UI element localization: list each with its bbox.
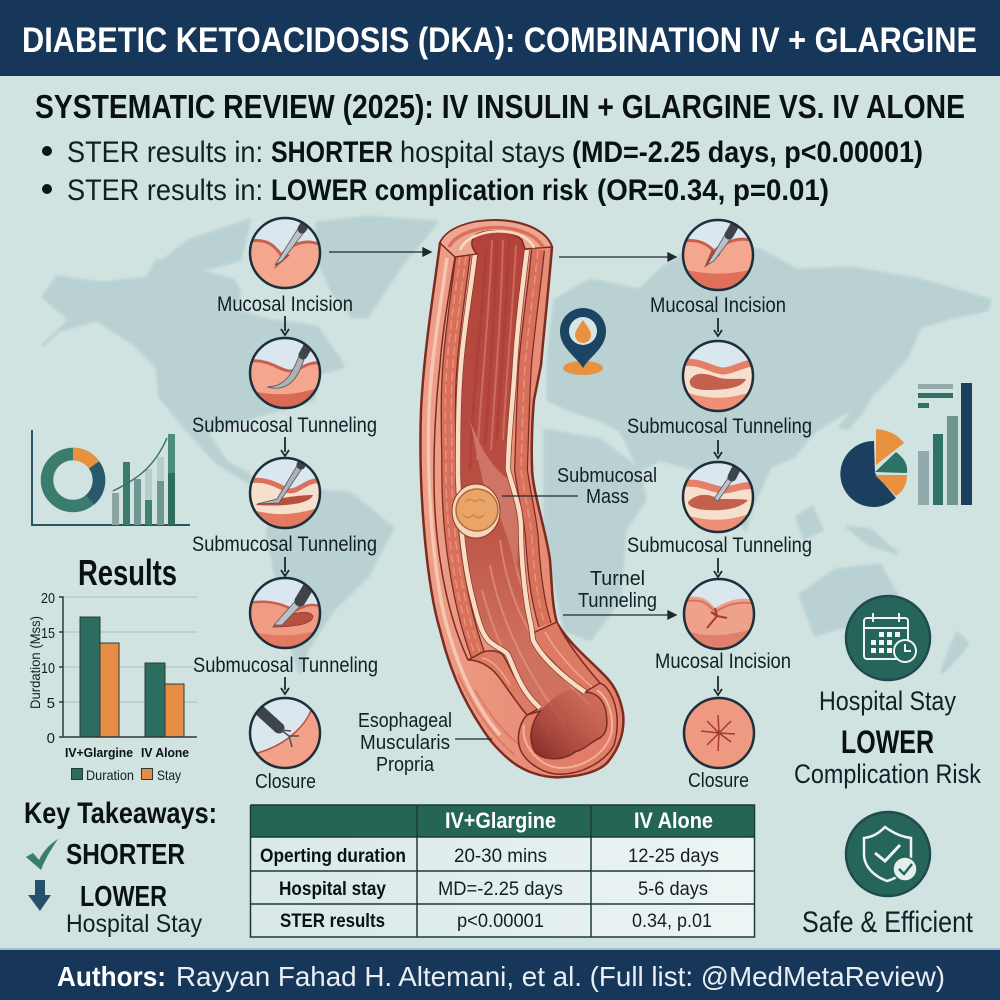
legend: Stay <box>157 767 181 783</box>
right muscle layer <box>521 250 545 625</box>
icon: step 4 tunneling <box>249 577 321 649</box>
arrow <box>281 677 289 694</box>
bullet: shorter hospital stays: STER results in: <box>67 136 263 169</box>
top cross-section ring <box>440 220 552 257</box>
y axis numbers: 0 <box>47 730 55 747</box>
hospital stay: Hospital Stay <box>66 910 202 938</box>
lumen streaks <box>470 240 509 470</box>
esophagus illustration <box>420 220 623 777</box>
arrow <box>281 316 289 335</box>
icon: step 4 incision crack <box>683 578 755 650</box>
y axis numbers: 5 <box>47 695 55 712</box>
bullet: lower complication risk: STER results in: <box>67 174 263 207</box>
icon: step 5 closure <box>249 697 321 769</box>
table header row: IV Alone <box>634 808 713 833</box>
arrow <box>714 318 722 336</box>
y axis numbers: 20 <box>41 590 55 607</box>
wall highlights <box>428 258 500 735</box>
key takeaways <box>24 797 217 938</box>
arrow <box>714 676 722 695</box>
fold beside mass <box>470 420 520 570</box>
label: submucosal mass: Mass <box>586 486 629 508</box>
label: hospital stay lower complication risk: Hospital Stay <box>819 686 956 716</box>
row: operating duration <box>260 846 719 867</box>
label: submucosal tunneling: Submucosal Tunneling <box>627 415 812 438</box>
y axis numbers: 15 <box>41 625 55 642</box>
label: closure: Closure <box>688 770 749 792</box>
row: operating duration: 20-30 mins <box>454 846 547 867</box>
footer bar with authors: Authors: <box>57 961 166 992</box>
icon: step 1 incision <box>249 213 321 289</box>
arrow <box>281 437 289 456</box>
bullet: shorter hospital stays: (MD=-2.25 days, p<0.00001) <box>572 136 923 169</box>
left lower strip <box>468 651 540 715</box>
label: esophageal muscularis propria: Muscularis <box>360 732 450 754</box>
y axis numbers <box>41 590 55 747</box>
row: ster results: STER results <box>280 911 385 932</box>
table cells <box>250 837 755 937</box>
label: submucosal mass: Submucosal <box>557 465 657 487</box>
bullet: shorter hospital stays: hospital stays <box>400 136 565 169</box>
lower: LOWER <box>80 881 167 913</box>
heading: results: Results <box>78 552 177 593</box>
legend: Duration <box>86 767 134 783</box>
table header row <box>250 805 755 837</box>
icon: step 1 incision <box>682 219 754 291</box>
bullet: lower complication risk <box>42 174 829 207</box>
icon: check <box>26 839 58 870</box>
outer wall <box>420 220 623 777</box>
icon: step 5 closure scar <box>684 698 754 768</box>
label: submucosal tunneling: Submucosal Tunneling <box>193 654 378 677</box>
bottom opening rim <box>518 682 617 774</box>
label: esophageal muscularis propria: Propria <box>376 754 435 776</box>
legend <box>72 767 181 783</box>
icon: shield check <box>846 812 930 896</box>
label: submucosal tunneling: Submucosal Tunneling <box>192 533 377 556</box>
label: submucosal tunneling: Submucosal Tunneling <box>192 414 377 437</box>
label: mucosal incision: Mucosal Incision <box>650 294 786 317</box>
bar chart: duration and stay <box>27 590 197 783</box>
bullet: shorter hospital stays: SHORTER <box>271 136 393 169</box>
left pale layer <box>458 254 540 708</box>
world map backdrop <box>43 217 990 673</box>
row: hospital stay <box>279 879 708 900</box>
icon: step 3 tunneling <box>249 455 321 529</box>
label: esophageal muscularis propria <box>358 710 492 776</box>
row: ster results: 0.34, p.01 <box>632 911 712 932</box>
footer bar with authors <box>0 948 1000 1000</box>
label: submucosal tunneling: Submucosal Tunneling <box>627 534 812 557</box>
header bar with title <box>0 0 1000 76</box>
row: ster results <box>280 911 712 932</box>
row: ster results: p<0.00001 <box>457 911 544 932</box>
row: hospital stay: MD=-2.25 days <box>438 879 563 900</box>
hole interior <box>531 684 608 761</box>
label: closure: Closure <box>255 771 316 793</box>
row: operating duration: 12-25 days <box>628 846 719 867</box>
x axis labels: IV Alone <box>141 745 189 760</box>
label: submucosal mass <box>502 465 657 508</box>
lumen <box>458 231 608 761</box>
label: mucosal incision: Mucosal Incision <box>655 650 791 673</box>
arrow: esophagus to right circle <box>559 253 676 261</box>
panel: right procedure steps <box>627 219 812 792</box>
icon: down arrow <box>28 880 51 911</box>
comparison table <box>250 805 755 937</box>
right lower strip <box>533 622 600 692</box>
x axis labels: IV+Glargine <box>65 745 133 760</box>
arrow <box>714 440 722 458</box>
icon: dashboard donut and bars <box>32 430 190 525</box>
table header row: IV+Glargine <box>445 808 556 833</box>
arrow <box>714 558 722 577</box>
icon: map pin <box>560 308 606 375</box>
row: hospital stay: Hospital stay <box>279 879 386 900</box>
icon: step 2 tunneling <box>249 337 321 409</box>
left muscle layer <box>448 255 478 655</box>
label: mucosal incision: Mucosal Incision <box>217 293 353 316</box>
bars <box>80 617 184 737</box>
arrow <box>281 557 289 576</box>
icon: calendar with clock <box>846 596 930 680</box>
bullet: shorter hospital stays <box>42 136 923 169</box>
y axis title: Durdation (Mss) <box>27 616 43 709</box>
label: hospital stay lower complication risk: LOWER <box>841 724 934 760</box>
takeaways heading: Key Takeaways: <box>24 797 217 830</box>
label: hospital stay lower complication risk <box>794 686 981 789</box>
bullet: lower complication risk: LOWER complication risk <box>271 174 588 207</box>
footer bar with authors: Rayyan Fahad H. Altemani, et al. (Full list: @MedMetaReview) <box>176 961 945 992</box>
icon: pie and bars <box>840 383 972 507</box>
label: esophageal muscularis propria: Esophageal <box>358 710 452 732</box>
label: tunnel tunneling: Turnel <box>590 568 645 590</box>
bullet: lower complication risk: (OR=0.34, p=0.01) <box>597 174 829 207</box>
right pale layer <box>508 250 585 692</box>
x axis labels <box>65 745 189 760</box>
shorter: SHORTER <box>66 839 185 871</box>
label: tunnel tunneling: Tunneling <box>578 590 657 612</box>
y axis numbers: 10 <box>41 660 55 677</box>
submucosal mass <box>452 484 500 538</box>
label: tunnel tunneling <box>563 568 676 619</box>
icon: step 2 tunnel <box>682 340 754 412</box>
icon: step 3 tunnel with scalpel <box>682 461 754 533</box>
arrow: left circle to esophagus <box>329 248 431 256</box>
panel: left procedure steps <box>192 213 378 793</box>
row: hospital stay: 5-6 days <box>638 879 708 900</box>
wall seam line <box>434 257 468 660</box>
row: operating duration: Operting duration <box>260 846 406 867</box>
